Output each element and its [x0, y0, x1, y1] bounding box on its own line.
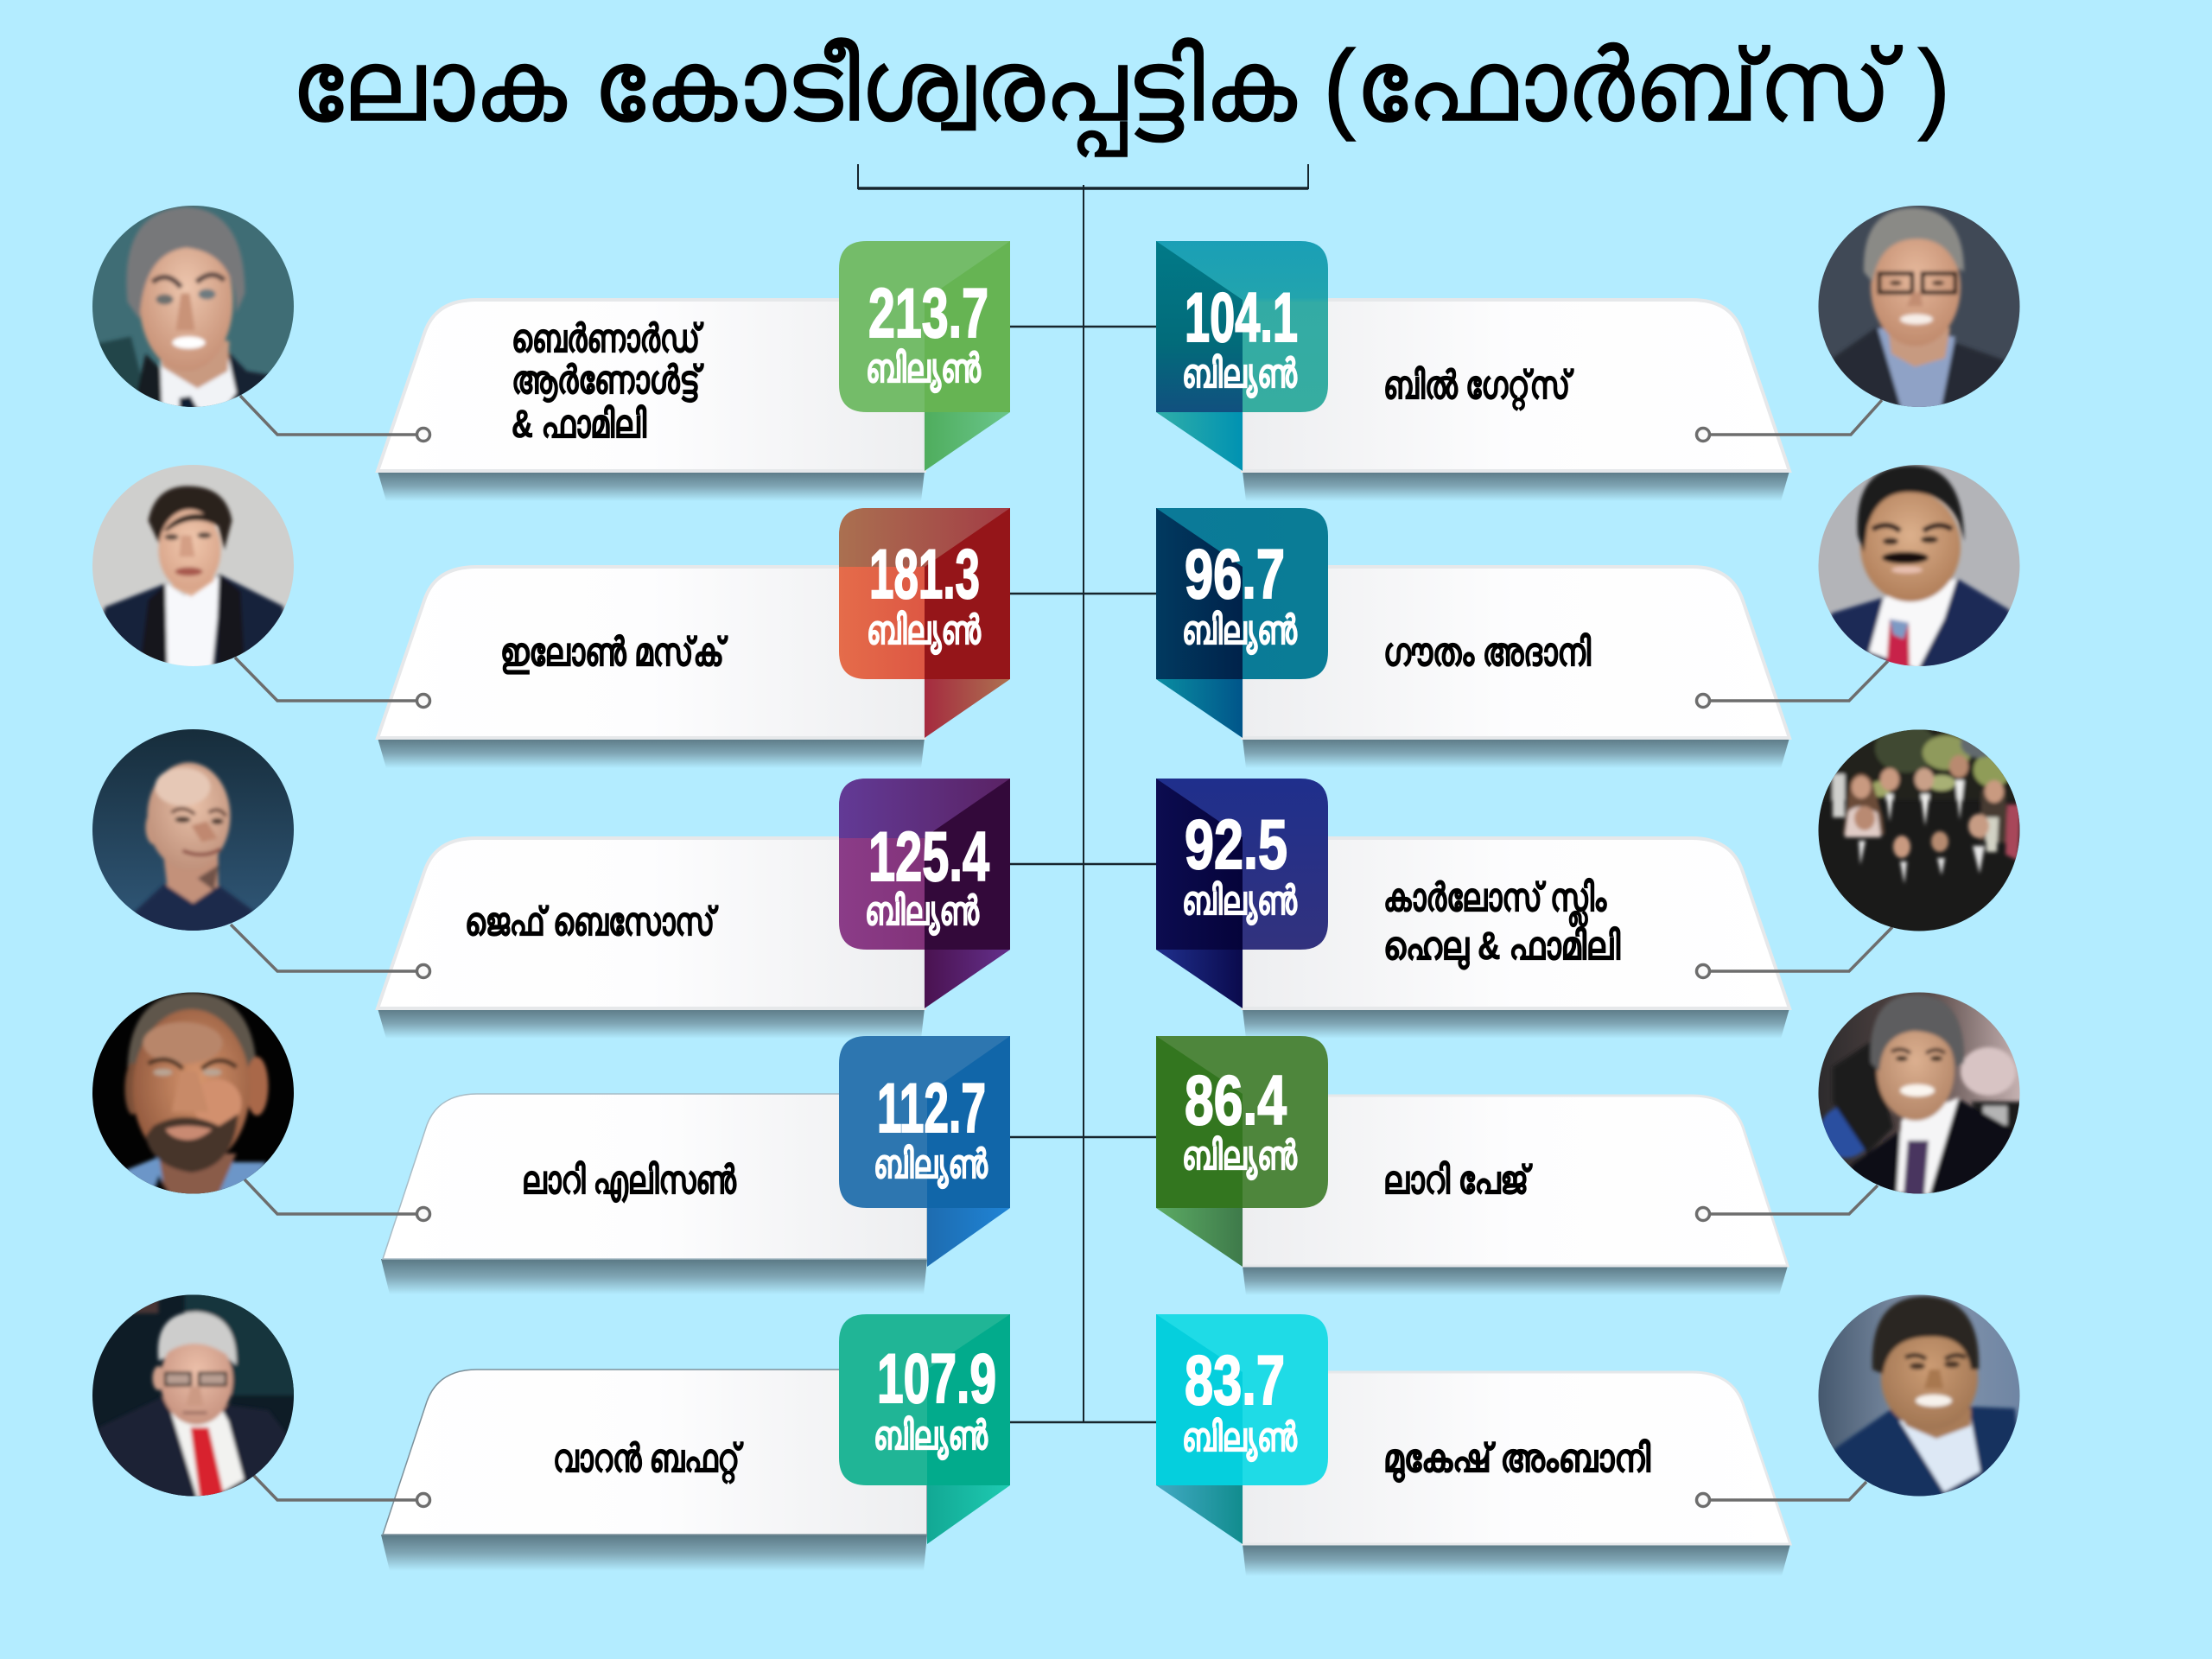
- value badge: [839, 241, 1010, 471]
- name: ഹെലു & ഫാമിലി: [1383, 924, 1620, 970]
- label panel: [1243, 1096, 1788, 1295]
- row: Larry Page: [1156, 989, 2023, 1295]
- row: Mukesh Ambani: [1156, 1292, 2023, 1576]
- value badge: ബില്യൺ: [1182, 607, 1297, 655]
- portrait connector: [1697, 400, 1882, 441]
- value badge: 213.7: [868, 275, 988, 353]
- name: ഇലോൺ മസ്‌ക്: [500, 630, 728, 675]
- row: Jeff Bezos: [90, 726, 1010, 1039]
- value badge: ബില്യൺ: [1182, 1414, 1297, 1462]
- portrait connector: [1697, 1185, 1878, 1220]
- value badge: 125.4: [868, 818, 989, 896]
- value badge: ബില്യൺ: [874, 1141, 988, 1189]
- value badge: 86.4: [1185, 1062, 1287, 1140]
- name: ബിൽ ഗേറ്റ്‌സ്: [1383, 363, 1573, 411]
- value badge: 104.1: [1185, 279, 1298, 357]
- value badge: ബില്യൺ: [867, 607, 981, 655]
- portrait: Jeff Bezos: [90, 726, 297, 933]
- value badge: ബില്യൺ: [874, 1413, 988, 1460]
- portrait connector: [235, 658, 430, 707]
- value badge: [1156, 508, 1328, 738]
- title: ലോക കോടീശ്വരപ്പട്ടിക (ഫോർബ്‌സ് ): [291, 29, 1950, 157]
- portrait connector: [253, 1475, 430, 1507]
- value badge: [1156, 241, 1328, 471]
- value badge: 96.7: [1185, 536, 1285, 613]
- name: & ഫാമിലി: [512, 402, 646, 446]
- label panel: [378, 300, 925, 501]
- name: ലാറി പേജ്: [1383, 1158, 1533, 1202]
- row: Larry Ellison: [90, 989, 1010, 1294]
- name: ജെഫ് ബെസോസ്: [465, 899, 718, 944]
- value badge: [1156, 779, 1328, 1008]
- value badge: ബില്യൺ: [866, 346, 981, 393]
- name: [512, 316, 704, 446]
- name: ബെർണാർഡ്: [512, 316, 703, 360]
- value badge: [839, 779, 1010, 1008]
- value badge: 107.9: [877, 1340, 996, 1418]
- portrait: Mukesh Ambani: [1815, 1292, 2023, 1499]
- name: വാറൻ ബഫറ്റ്: [553, 1436, 743, 1484]
- portrait: Larry Ellison: [90, 989, 297, 1197]
- portrait connector: [1697, 1482, 1866, 1507]
- portrait connector: [231, 925, 430, 978]
- name: ആർണോൾട്ട്: [512, 358, 704, 403]
- label panel: [1243, 567, 1789, 768]
- name: മുകേഷ് അംബാനി: [1383, 1436, 1650, 1484]
- value badge: [839, 1314, 1010, 1544]
- name: ലാറി എലിസൺ: [522, 1158, 737, 1204]
- value badge: [1156, 1036, 1328, 1267]
- row: Bill Gates: [1156, 202, 2023, 501]
- value badge: [1156, 1314, 1328, 1544]
- label panel: [378, 567, 925, 768]
- portrait connector: [1697, 661, 1888, 707]
- portrait connector: [1697, 927, 1892, 978]
- portrait: Larry Page: [1815, 989, 2023, 1197]
- name: [1383, 875, 1620, 970]
- portrait: Carlos Slim Helu family: [1815, 724, 2023, 934]
- value badge: 112.7: [877, 1070, 986, 1147]
- row: Gautam Adani: [1156, 461, 2023, 768]
- name: ഗൗതം അദാനി: [1383, 630, 1591, 674]
- label panel: [381, 1094, 927, 1294]
- value badge: 83.7: [1185, 1342, 1285, 1420]
- portrait: Gautam Adani: [1815, 461, 2023, 669]
- row: Carlos Slim Helu and family: [1156, 724, 2023, 1039]
- name: കാർലോസ് സ്ലിം: [1383, 875, 1607, 927]
- row: Bernard Arnault: [90, 202, 1010, 501]
- label panel: [1243, 838, 1789, 1039]
- value badge: ബില്യൺ: [1182, 1133, 1297, 1180]
- portrait connector: [240, 396, 430, 441]
- label panel: [1243, 300, 1789, 501]
- label panel: [381, 1370, 927, 1571]
- connector tree: [858, 164, 1308, 1422]
- label panel: [1243, 1372, 1790, 1576]
- portrait: Bill Gates: [1815, 202, 2023, 410]
- portrait: Elon Musk: [90, 461, 297, 669]
- value badge: ബില്യൺ: [1182, 351, 1297, 398]
- value badge: [839, 508, 1010, 738]
- portrait: Warren Buffett: [90, 1292, 297, 1499]
- row: Warren Buffett: [90, 1292, 1010, 1571]
- value badge: ബില്യൺ: [1182, 878, 1297, 925]
- label panel: [378, 838, 925, 1039]
- portrait connector: [245, 1179, 430, 1220]
- value badge: 92.5: [1185, 806, 1287, 884]
- value badge: [839, 1036, 1010, 1267]
- value badge: 181.3: [869, 536, 980, 613]
- row: Elon Musk: [90, 461, 1010, 768]
- value badge: ബില്യൺ: [865, 888, 979, 936]
- portrait: Bernard Arnault: [90, 202, 297, 410]
